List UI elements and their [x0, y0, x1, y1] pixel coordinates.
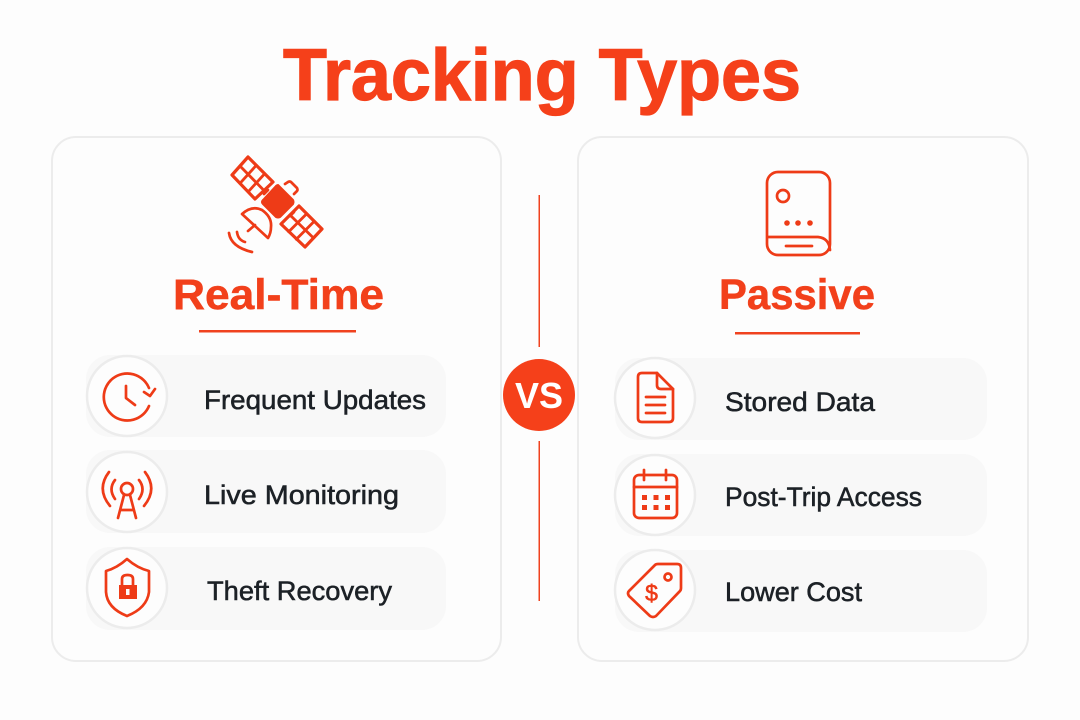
heading: Passive: Passive [719, 271, 875, 319]
underline [735, 332, 860, 334]
row: Lower Cost [615, 550, 987, 632]
icon: price tag: $ [645, 580, 658, 606]
icon: document [638, 373, 673, 422]
label: Stored Data [725, 387, 876, 417]
icon: calendar [634, 470, 677, 518]
label: Lower Cost [725, 577, 862, 607]
icon: radio tower [103, 472, 151, 518]
row: Stored Data [615, 358, 987, 440]
panel: Passive [578, 137, 1028, 661]
icon: shield with lock [106, 559, 149, 616]
row: Live Monitoring [86, 450, 446, 533]
label: Live Monitoring [204, 480, 399, 510]
icon: clock [104, 373, 155, 420]
title: Tracking Types [283, 35, 801, 116]
icon: price tag [628, 564, 681, 617]
icon: satellite [229, 157, 322, 252]
label: Frequent Updates [204, 385, 426, 415]
heading: Real-Time: Real-Time [173, 271, 384, 319]
row: Theft Recovery [86, 547, 446, 630]
row: Post-Trip Access [615, 454, 987, 536]
icon: storage device [767, 172, 830, 255]
underline [199, 330, 356, 332]
divider with VS badge: VS [515, 375, 563, 416]
row: Frequent Updates [86, 355, 446, 437]
divider with VS badge [503, 195, 575, 601]
label: Theft Recovery [207, 576, 392, 606]
label: Post-Trip Access [725, 482, 922, 512]
panel: Real-Time [52, 137, 501, 661]
